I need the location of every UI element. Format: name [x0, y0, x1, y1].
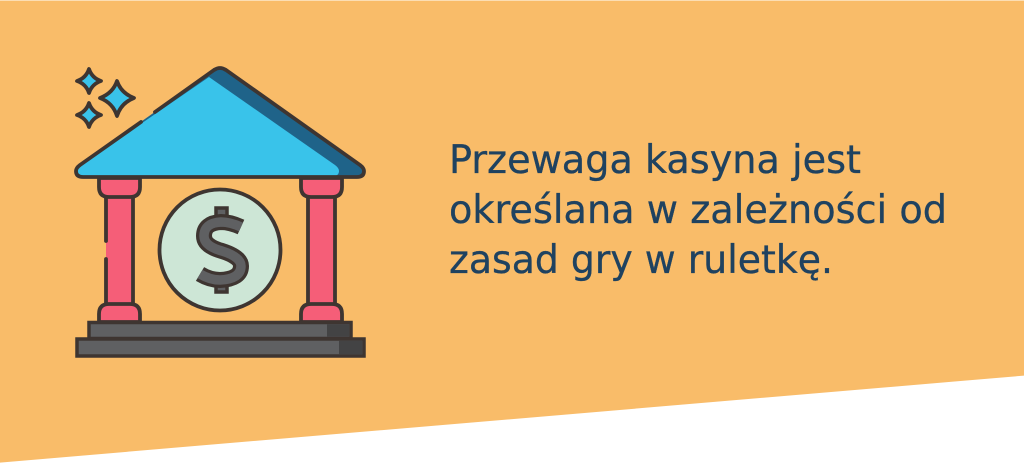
- icon: bank building with dollar: [76, 68, 364, 356]
- line 2: określana w zależności od: [449, 188, 947, 233]
- upper step: [89, 322, 351, 338]
- roof: [76, 68, 364, 177]
- line 1: Przewaga kasyna jest: [449, 138, 861, 183]
- coin: [160, 190, 280, 310]
- icon: dollar sign: [200, 208, 241, 292]
- icon: sparkles: [77, 69, 134, 127]
- text block: [449, 138, 947, 283]
- line 3: zasad gry w ruletkę.: [449, 238, 833, 283]
- left column: [99, 178, 140, 322]
- lower step: [77, 339, 364, 356]
- right column: [301, 178, 342, 322]
